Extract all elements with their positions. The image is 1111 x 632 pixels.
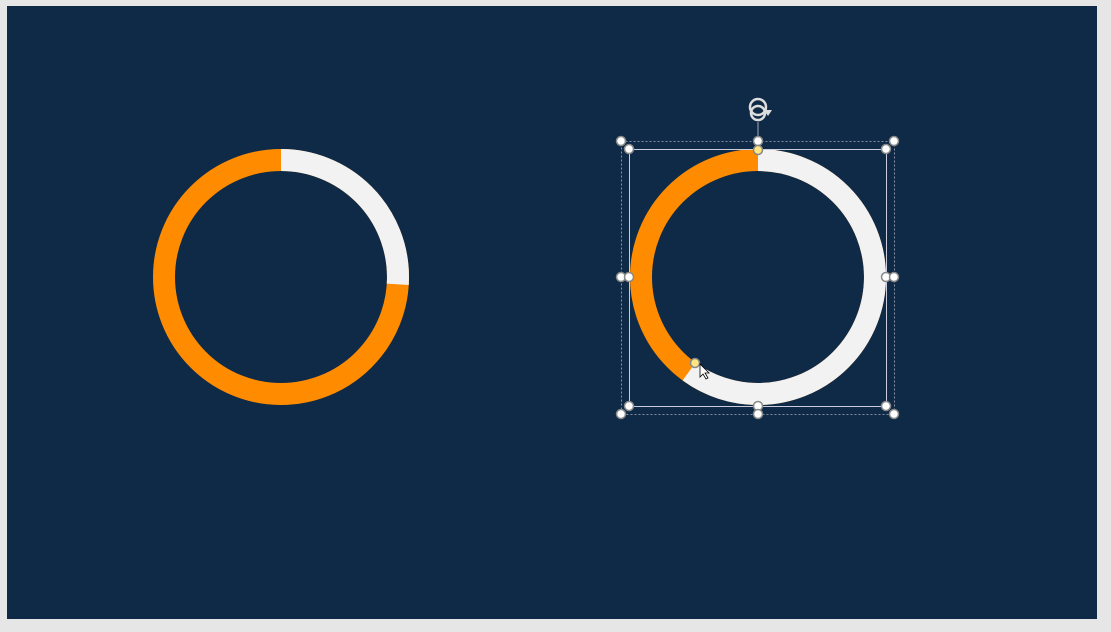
chart: right donut ring (selected) (641, 160, 875, 394)
selection frame (616, 122, 898, 418)
chart: left donut ring (164, 160, 398, 394)
icon: mouse cursor (700, 364, 709, 379)
icon: rotate handle (750, 99, 772, 120)
